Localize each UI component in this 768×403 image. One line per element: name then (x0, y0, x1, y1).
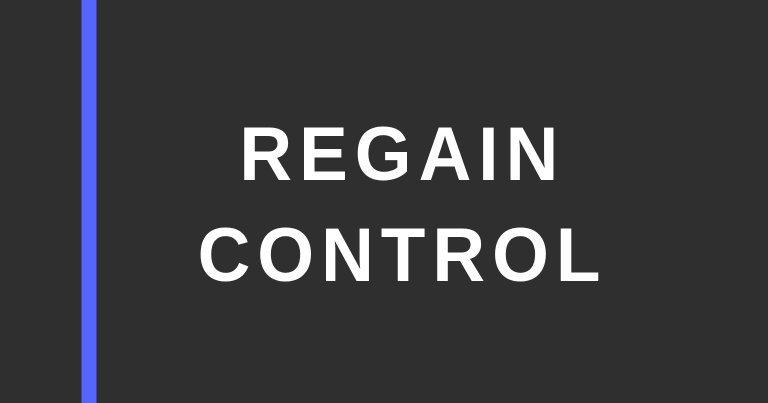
title: REGAIN (239, 112, 565, 197)
title: CONTROL (198, 213, 608, 298)
